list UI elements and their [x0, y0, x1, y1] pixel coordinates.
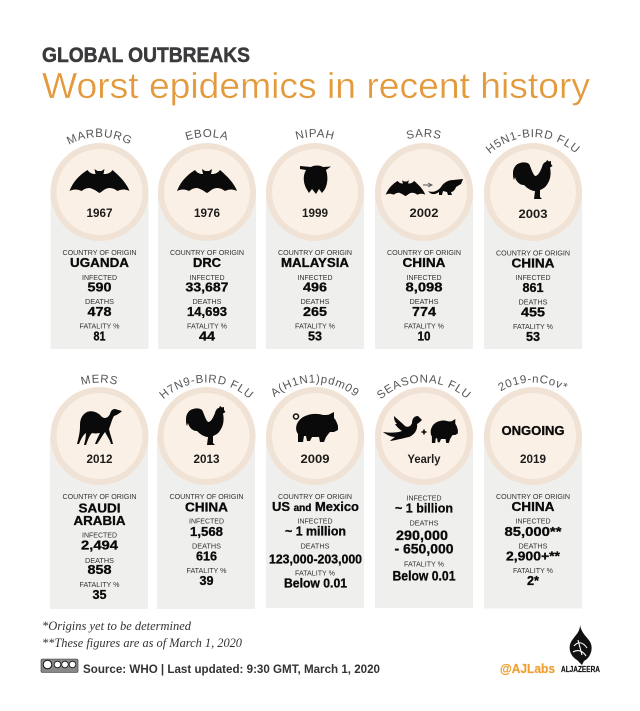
- stats: H5N1 bird flu: DEATHS: [518, 298, 548, 306]
- stats: MERS: [62, 492, 136, 602]
- stats: H7N9 bird flu: CHINA: [185, 499, 229, 514]
- stats: SARS: COUNTRY OF ORIGIN: [387, 248, 461, 257]
- stats: SARS: FATALITY %: [404, 322, 444, 330]
- stats: Nipah: INFECTED: [298, 273, 333, 282]
- title: Worst epidemics in recent history: [42, 65, 590, 106]
- disease name: 2019-nCov: 2019-nCov*: [498, 375, 568, 392]
- year: 1976: 1976: [194, 208, 220, 220]
- stats: H5N1 bird flu: COUNTRY OF ORIGIN: [496, 248, 570, 258]
- icon: bat: [70, 169, 130, 193]
- label: yearly: Yearly: [408, 454, 441, 466]
- stats: Marburg: INFECTED: [82, 273, 118, 282]
- panel: Ebola: [158, 129, 256, 349]
- year: 2003: 2003: [518, 209, 548, 221]
- stats: MERS: 858: [88, 562, 112, 577]
- Al Jazeera wordmark: ALJAZEERA: [561, 665, 600, 674]
- stats: H5N1 bird flu: INFECTED: [516, 273, 551, 282]
- stats: H5N1 bird flu: CHINA: [512, 256, 555, 270]
- stats: Marburg: [62, 248, 136, 344]
- disease name: SARS: SARS: [406, 129, 441, 139]
- stats: H5N1 bird flu: FATALITY %: [513, 322, 553, 331]
- stats: MERS: ARABIA: [74, 513, 126, 528]
- source line: Source: WHO | Last updated: 9:30 GMT, March 1, 2020: [83, 664, 380, 676]
- panel: seasonal flu: [375, 374, 473, 608]
- stats: Marburg: COUNTRY OF ORIGIN: [62, 248, 136, 257]
- stats: H7N9 bird flu: [170, 492, 244, 588]
- stats: 2019-nCov: INFECTED: [516, 517, 551, 526]
- icon: rooster: [513, 160, 552, 199]
- stats: Ebola: DRC: [193, 255, 222, 270]
- stats: seasonal flu: - 650,000: [394, 541, 454, 557]
- year: 2012: 2012: [86, 454, 112, 466]
- stats: 2019-nCov: 2*: [527, 573, 540, 588]
- panel: A(H1N1)pdm09: [266, 374, 364, 608]
- icon: bird plus pig: [383, 416, 458, 443]
- stats: A(H1N1)pdm09: 123,000-203,000: [269, 551, 362, 566]
- stats: MERS: FATALITY %: [80, 580, 120, 589]
- disease name: A(H1N1)pdm09: A(H1N1)pdm09: [272, 374, 358, 398]
- stats: H7N9 bird flu: 39: [200, 573, 214, 588]
- stats: SARS: INFECTED: [406, 273, 442, 282]
- stats: 2019-nCov: DEATHS: [518, 542, 548, 551]
- stats: Marburg: UGANDA: [70, 255, 130, 270]
- stats: A(H1N1)pdm09: INFECTED: [298, 517, 333, 526]
- icon: hanging bat: [300, 166, 331, 194]
- footnotes: *Origins yet to be determined: [42, 618, 191, 633]
- stats: Marburg: DEATHS: [85, 297, 114, 306]
- stats: SARS: 774: [412, 304, 437, 319]
- stats: H7N9 bird flu: DEATHS: [192, 542, 221, 551]
- panel: MERS: [50, 374, 148, 609]
- panel: H5N1 bird flu: [484, 129, 582, 349]
- stats: H5N1 bird flu: 53: [526, 329, 540, 344]
- stats: A(H1N1)pdm09: Below 0.01: [284, 576, 347, 591]
- stats: SARS: [387, 248, 461, 344]
- stats: seasonal flu: INFECTED: [406, 494, 442, 503]
- stats: MERS: COUNTRY OF ORIGIN: [62, 492, 136, 501]
- stats: MERS: 35: [92, 587, 106, 602]
- stats: Nipah: 496: [303, 280, 327, 294]
- stats: Marburg: FATALITY %: [80, 322, 120, 330]
- stats: seasonal flu: DEATHS: [410, 519, 438, 528]
- icon: Al Jazeera logo: [570, 625, 592, 665]
- icon: bat and civet: [386, 179, 463, 196]
- stats: H7N9 bird flu: COUNTRY OF ORIGIN: [170, 492, 244, 501]
- stats: Marburg: 590: [88, 280, 112, 294]
- disease name: Ebola: EBOLA: [185, 129, 227, 140]
- stats: Marburg: 478: [88, 304, 112, 319]
- stats: Ebola: INFECTED: [190, 273, 225, 282]
- disease name: Nipah: NIPAH: [296, 129, 334, 140]
- disease name: Marburg: MARBURG: [66, 128, 132, 144]
- stats: MERS: INFECTED: [82, 531, 118, 540]
- disease name: MERS: MERS: [81, 374, 118, 385]
- disease name: seasonal flu: SEASONAL FLU: [377, 374, 471, 398]
- stats: 2019-nCov: FATALITY %: [513, 566, 553, 575]
- stats: Ebola: 44: [199, 328, 216, 344]
- stats: A(H1N1)pdm09: US and Mexico: [272, 499, 359, 514]
- stats: 2019-nCov: [496, 492, 570, 588]
- stats: Nipah: [278, 248, 352, 344]
- panel: Marburg: [50, 128, 148, 349]
- stats: Nipah: 53: [308, 328, 322, 344]
- stats: MERS: SAUDI: [78, 500, 120, 516]
- stats: SARS: 10: [418, 328, 430, 344]
- stats: A(H1N1)pdm09: COUNTRY OF ORIGIN: [278, 492, 352, 501]
- panel: H7N9 bird flu: [157, 374, 256, 609]
- year: 2009: 2009: [300, 454, 330, 466]
- footnotes: [42, 618, 242, 650]
- year: 2019: 2019: [520, 454, 546, 466]
- stats: Nipah: DEATHS: [300, 297, 330, 306]
- stats: Ebola: [170, 248, 244, 344]
- stats: Ebola: 33,687: [186, 280, 228, 294]
- year: 2013: 2013: [194, 454, 220, 466]
- stats: A(H1N1)pdm09: FATALITY %: [295, 568, 335, 577]
- stats: Nipah: 265: [303, 304, 327, 319]
- stats: SARS: DEATHS: [410, 297, 438, 306]
- heading: global outbreaks: GLOBAL OUTBREAKS: [42, 44, 250, 67]
- stats: seasonal flu: FATALITY %: [404, 559, 444, 568]
- panel: Nipah: [266, 129, 364, 349]
- stats: Nipah: COUNTRY OF ORIGIN: [278, 248, 352, 257]
- icon: bat: [177, 169, 237, 193]
- stats: H7N9 bird flu: INFECTED: [189, 517, 225, 526]
- stats: H7N9 bird flu: FATALITY %: [186, 566, 227, 575]
- AJLabs handle: @AJLabs: [500, 661, 555, 676]
- stats: MERS: DEATHS: [85, 556, 114, 565]
- icon: pig: [294, 412, 338, 442]
- stats: A(H1N1)pdm09: [269, 492, 362, 591]
- panel: SARS: [375, 129, 473, 349]
- stats: 2019-nCov: COUNTRY OF ORIGIN: [496, 492, 570, 501]
- panel: 2019-nCov: [484, 375, 582, 608]
- disease name: H7N9 bird flu: H7N9-BIRD FLU: [159, 374, 254, 399]
- stats: H7N9 bird flu: 1,568: [190, 524, 223, 539]
- stats: A(H1N1)pdm09: DEATHS: [300, 542, 330, 551]
- year: 1967: 1967: [86, 208, 112, 220]
- status: ongoing: ONGOING: [502, 423, 564, 438]
- stats: Ebola: FATALITY %: [187, 322, 227, 330]
- footnotes: **These figures are as of March 1, 2020: [42, 635, 242, 650]
- icon: camel: [77, 409, 122, 445]
- stats: seasonal flu: [392, 494, 456, 583]
- stats: SARS: CHINA: [402, 255, 446, 270]
- stats: seasonal flu: 290,000: [396, 527, 448, 543]
- stats: H5N1 bird flu: 455: [521, 304, 545, 320]
- year: 1999: 1999: [302, 208, 328, 220]
- stats: H7N9 bird flu: 616: [196, 549, 217, 564]
- stats: H5N1 bird flu: 861: [522, 280, 544, 295]
- icon: rooster: [186, 406, 226, 445]
- stats: MERS: 2,494: [81, 538, 119, 553]
- stats: Nipah: MALAYSIA: [281, 255, 350, 270]
- icon: creative commons badge: [41, 659, 78, 672]
- stats: 2019-nCov: 2,900+**: [506, 549, 561, 564]
- stats: H5N1 bird flu: [496, 248, 570, 344]
- stats: 2019-nCov: 85,000**: [504, 524, 563, 539]
- stats: seasonal flu: Below 0.01: [392, 567, 456, 583]
- stats: SARS: 8,098: [406, 280, 442, 294]
- disease name: H5N1 bird flu: H5N1-BIRD FLU: [486, 129, 580, 154]
- stats: seasonal flu: ~ 1 billion: [395, 501, 453, 516]
- stats: Ebola: COUNTRY OF ORIGIN: [170, 248, 244, 257]
- stats: 2019-nCov: CHINA: [512, 499, 555, 514]
- year: 2002: 2002: [410, 208, 438, 220]
- stats: Marburg: 81: [94, 328, 106, 344]
- stats: Nipah: FATALITY %: [295, 322, 335, 330]
- stats: A(H1N1)pdm09: ~ 1 million: [285, 524, 346, 539]
- stats: Ebola: 14,693: [187, 304, 227, 319]
- stats: Ebola: DEATHS: [192, 297, 222, 306]
